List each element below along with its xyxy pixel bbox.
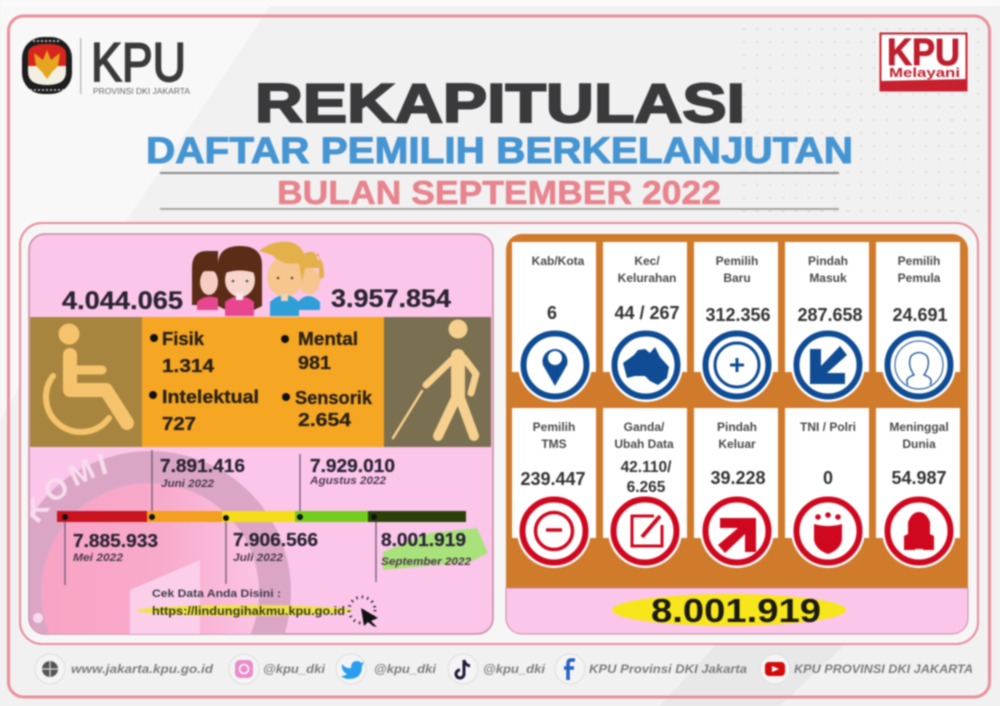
male voters count: 3.957.854 <box>331 285 451 313</box>
footer: social links <box>35 654 973 684</box>
card: Kec/Kelurahan: Kec/ <box>634 254 660 268</box>
youtube: KPU PROVINSI DKI JAKARTA <box>794 664 973 676</box>
card: Pemilih Pemula: Pemilih <box>898 254 940 268</box>
card: TNI / Polri: TNI / Polri <box>800 420 856 434</box>
icon: edit <box>614 500 676 562</box>
card: Kab/Kota: Kab/Kota <box>532 254 585 268</box>
card: Pindah Keluar: Keluar <box>718 437 756 451</box>
card: Pemilih TMS: 239.447 <box>520 469 586 489</box>
stat: Mental <box>281 329 358 373</box>
stat: Fisik: 1.314 <box>162 356 214 376</box>
link: check data: https://lindungihakmu.kpu.go.id <box>152 606 345 618</box>
stat: Mental: 981 <box>298 353 331 373</box>
highlight: latest month <box>383 528 488 570</box>
card: Kec/Kelurahan <box>614 254 680 396</box>
card: Pindah Keluar: Pindah <box>717 420 757 434</box>
icon: plus <box>706 334 768 396</box>
instagram <box>229 654 326 684</box>
female voters count: 4.044.065 <box>62 287 183 315</box>
total: 8.001.919 <box>651 592 821 629</box>
stat: Mental: Mental <box>298 329 358 349</box>
card: Meninggal Dunia: 54.987 <box>891 468 947 488</box>
card: Meninggal Dunia: Meninggal <box>889 420 949 434</box>
icon: person <box>888 334 950 396</box>
stat: Fisik: Fisik <box>162 329 205 349</box>
card: Kab/Kota <box>524 254 586 396</box>
icon: shield <box>796 500 860 562</box>
link: check data: Cek Data Anda Disini : <box>152 588 281 600</box>
logo: KPU emblem <box>22 37 72 94</box>
logo: KPU wordmark: PROVINSI DKI JAKARTA <box>93 87 191 96</box>
data: Juni: Juni 2022 <box>161 478 214 490</box>
youtube <box>760 654 973 684</box>
stat: Sensorik: 2.654 <box>298 410 351 430</box>
data: September: 8.001.919 <box>381 529 466 550</box>
card: Ganda/Ubah Data: Ganda/ <box>624 420 665 434</box>
icon: location pin <box>524 334 586 396</box>
card: Meninggal Dunia <box>888 420 950 562</box>
instagram: @kpu_dki <box>263 664 326 676</box>
stat: Sensorik <box>282 388 373 430</box>
stat: Fisik <box>150 329 214 376</box>
website: www.jakarta.kpu.go.id <box>71 664 214 676</box>
data: Mei: Mei 2022 <box>73 552 123 564</box>
facebook: KPU Provinsi DKI Jakarta <box>589 664 748 676</box>
card: Pindah Keluar: 39.228 <box>710 468 766 488</box>
card: Pemilih Baru: Pemilih <box>716 254 758 268</box>
logo: KPU Melayani: Melayani <box>889 65 960 80</box>
data: Juni: 7.891.416 <box>160 455 245 476</box>
card: Kab/Kota: 6 <box>547 303 557 323</box>
inner frame <box>20 223 978 644</box>
month heading: BULAN SEPTEMBER 2022 <box>277 174 721 211</box>
card: Pindah Masuk: Masuk <box>809 271 847 285</box>
card: Kec/Kelurahan: 44 / 267 <box>614 303 680 323</box>
card: Meninggal Dunia: Dunia <box>902 437 936 451</box>
tiktok: @kpu_dki <box>483 664 546 676</box>
data: September <box>381 529 471 568</box>
logo: KPU Melayani <box>880 32 967 91</box>
watermark emblem <box>30 450 292 635</box>
icon: blind person walking <box>393 320 476 438</box>
icon: arrow in <box>796 334 860 396</box>
data: Juli <box>233 529 318 564</box>
data: Agustus: Agustus 2022 <box>309 475 386 487</box>
card: Ganda/Ubah Data: 42.110/ <box>621 459 672 476</box>
icon: cursor <box>349 597 378 627</box>
twitter <box>336 654 437 684</box>
card: TNI / Polri: 0 <box>823 468 833 488</box>
twitter: @kpu_dki <box>374 664 437 676</box>
link: check data <box>137 588 378 627</box>
icon: arrow out <box>706 500 768 562</box>
stat: Sensorik: Sensorik <box>295 388 373 408</box>
card: Pemilih Baru: Baru <box>723 271 751 285</box>
data: Juli: 7.906.566 <box>233 529 318 550</box>
card: Pemilih Baru: 312.356 <box>705 305 771 325</box>
data: Agustus <box>309 455 395 487</box>
title: REKAPITULASI <box>255 72 745 134</box>
chart: monthly timeline <box>57 450 488 585</box>
data: Agustus: 7.929.010 <box>310 455 395 476</box>
panel: right statistics <box>506 234 968 634</box>
icon: deceased <box>888 500 950 562</box>
facebook <box>555 654 748 684</box>
card: Ganda/Ubah Data: Ubah Data <box>614 437 674 451</box>
subtitle: DAFTAR PEMILIH BERKELANJUTAN <box>146 130 853 171</box>
icon: voters group <box>192 242 324 316</box>
data: Juli: Juli 2022 <box>233 552 283 564</box>
card: Pemilih TMS <box>520 420 586 562</box>
watermark emblem: KOMI <box>30 454 108 524</box>
icon: minus <box>522 500 586 562</box>
card: Pemilih Pemula: 24.691 <box>892 305 948 325</box>
data: Juni <box>160 455 245 490</box>
website <box>35 654 214 684</box>
card: Pindah Keluar <box>706 420 768 562</box>
tiktok <box>448 654 546 684</box>
total <box>612 592 846 629</box>
card: Pemilih TMS: Pemilih <box>533 420 575 434</box>
card: Pemilih Baru <box>705 254 771 396</box>
logo: KPU wordmark: KPU <box>91 31 186 93</box>
card: Pindah Masuk <box>796 254 863 396</box>
card: TNI / Polri <box>796 420 860 562</box>
card: Pindah Masuk: Pindah <box>808 254 848 268</box>
card: Pemilih TMS: TMS <box>541 437 567 451</box>
data: Mei <box>73 530 158 564</box>
card: Kec/Kelurahan: Kelurahan <box>618 271 676 285</box>
stat: Intelektual: 727 <box>162 414 196 434</box>
icon: map <box>614 334 678 396</box>
icon: wheelchair <box>46 324 127 432</box>
card: Ganda/Ubah Data: 6.265 <box>627 479 666 496</box>
data: September: September 2022 <box>381 556 471 568</box>
card: Ganda/Ubah Data <box>614 420 676 562</box>
data: Mei: 7.885.933 <box>73 530 158 551</box>
logo: KPU Melayani: KPU <box>887 32 960 74</box>
card: Pemilih Pemula <box>888 254 950 396</box>
stat: Intelektual: Intelektual <box>162 387 259 407</box>
panel: disability band <box>30 317 491 447</box>
card: Pindah Masuk: 287.658 <box>797 305 863 325</box>
panel: left voters <box>27 232 495 636</box>
stat: Intelektual <box>149 387 259 434</box>
card: Pemilih Pemula: Pemula <box>898 271 941 285</box>
